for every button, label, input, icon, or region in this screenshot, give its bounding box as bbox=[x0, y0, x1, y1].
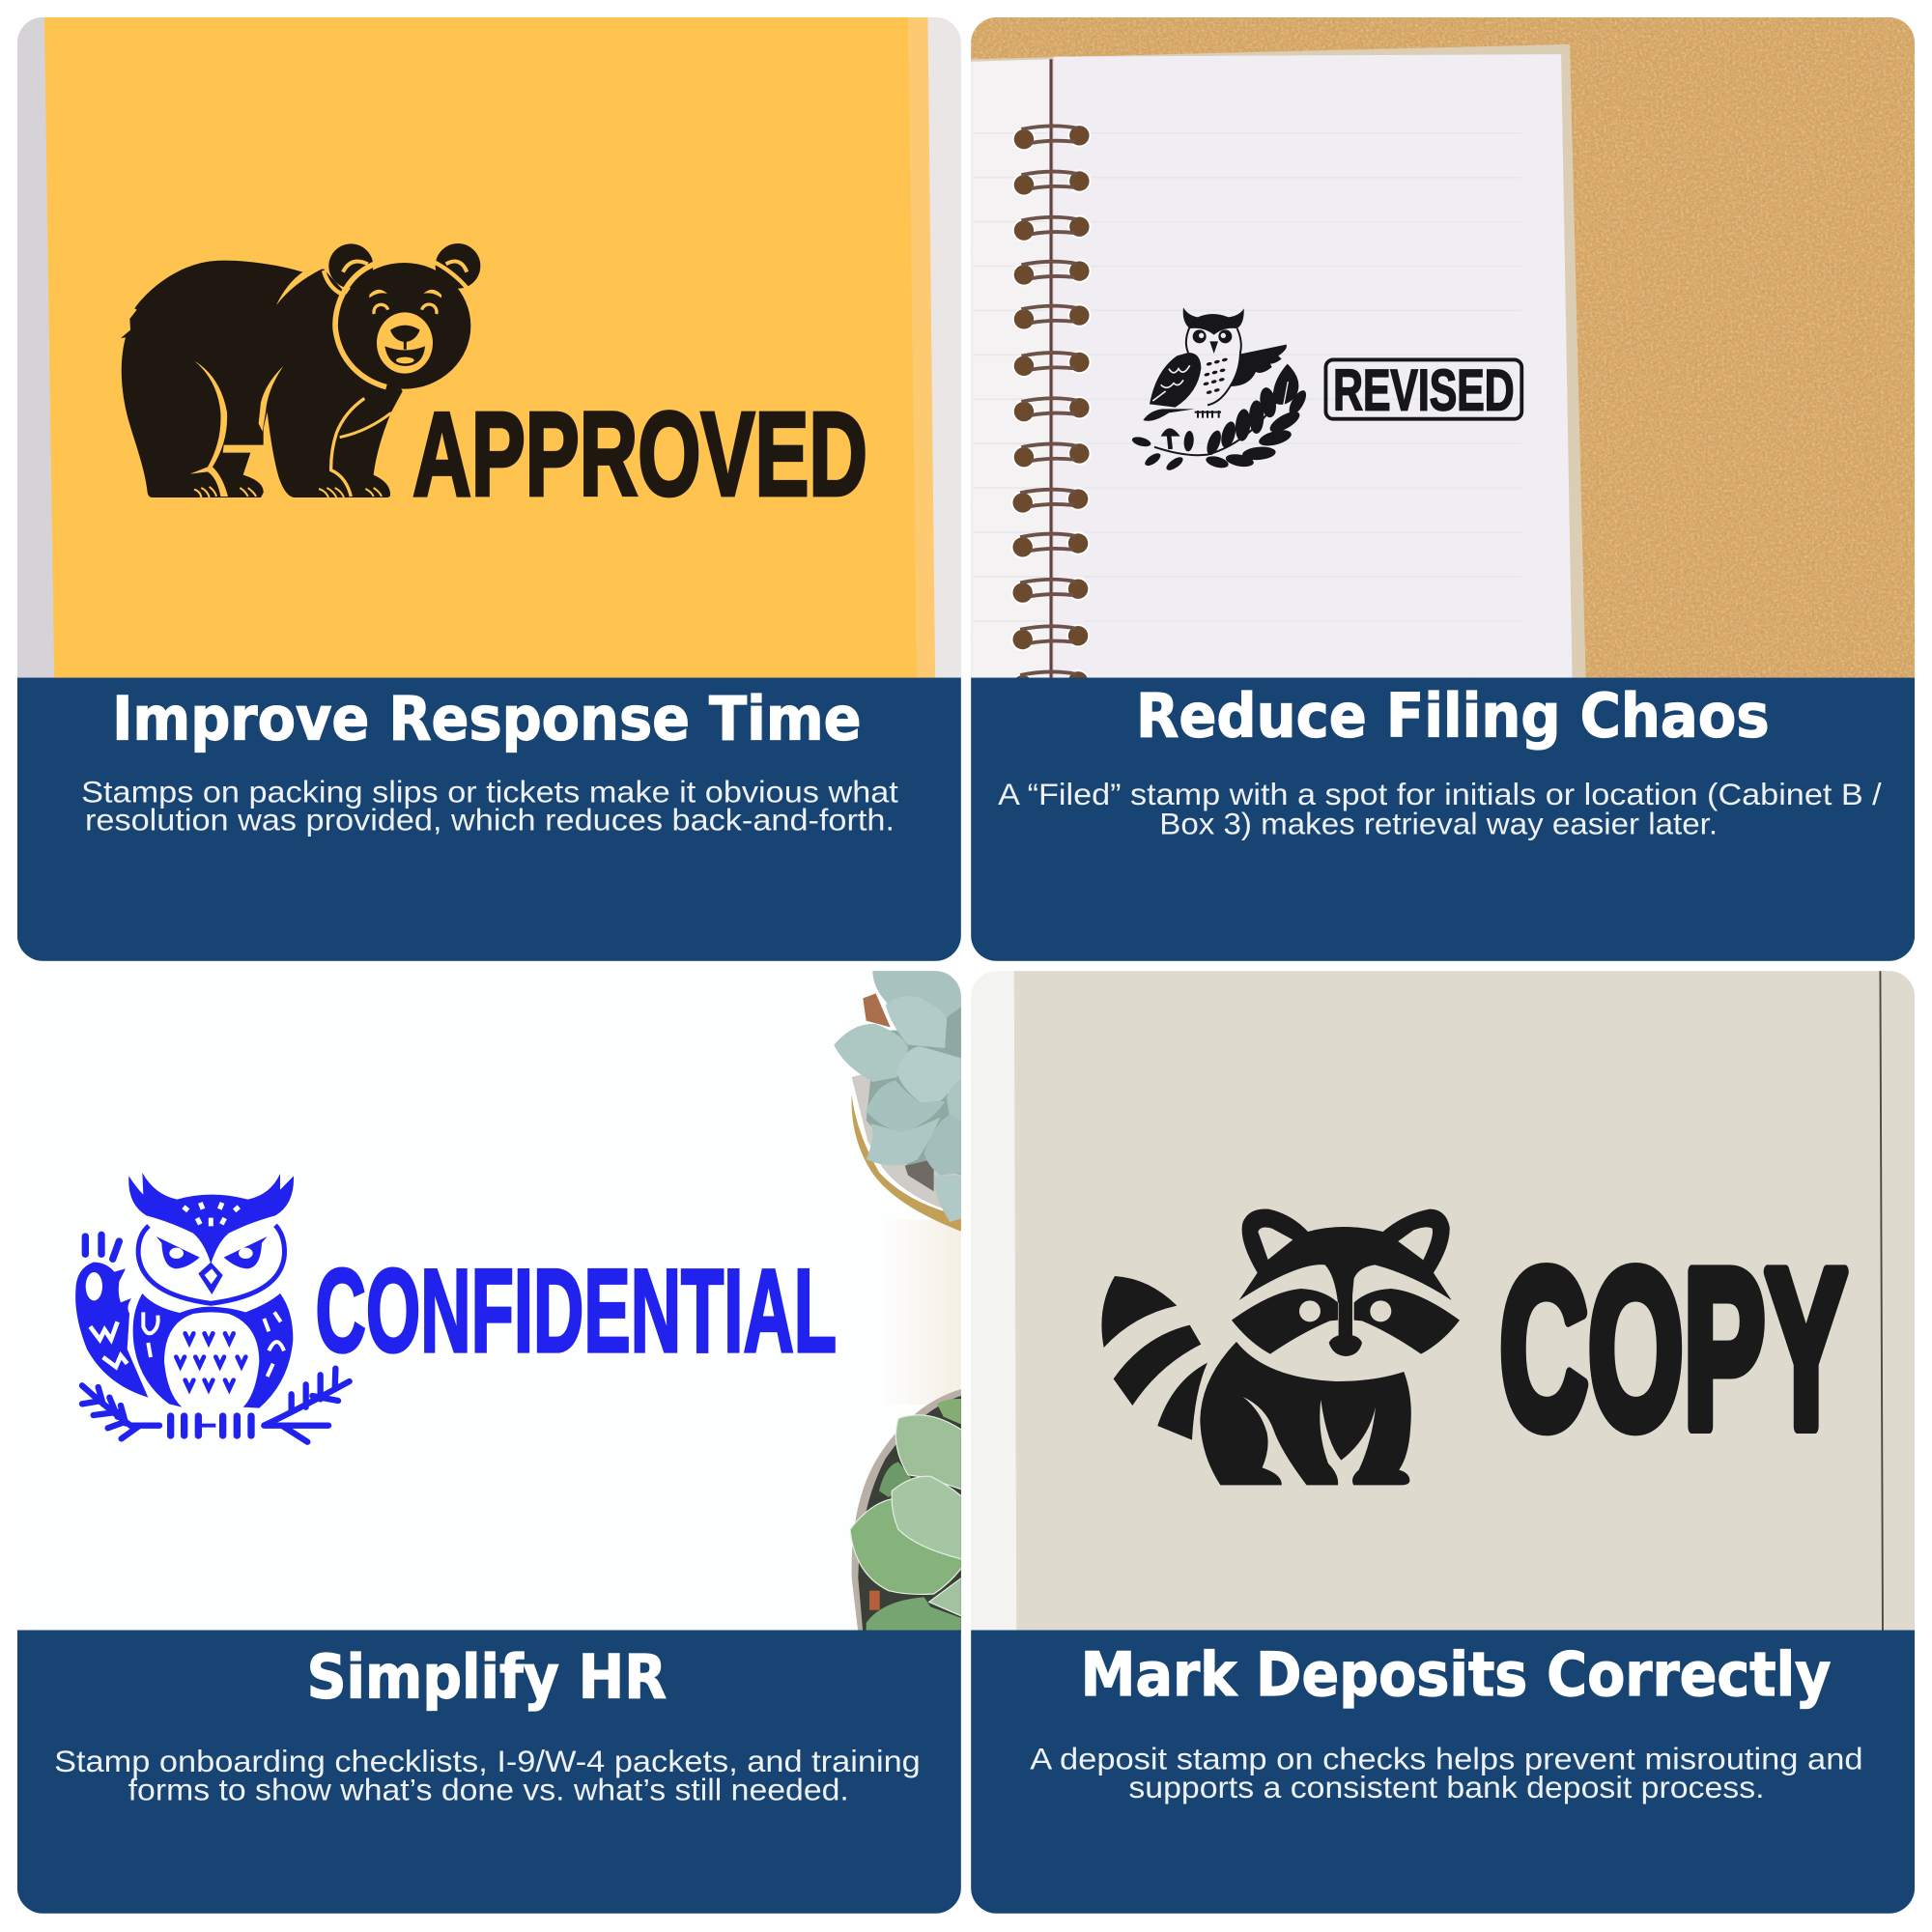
photo: white desk bbox=[17, 971, 961, 1632]
panel: reduce filing chaos bbox=[971, 17, 1915, 961]
body text: A “Filed” stamp with a spot for initials or location (Cabinet B / bbox=[998, 777, 1882, 811]
photo: yellow paper bbox=[17, 17, 961, 678]
body text: Box 3) makes retrieval way easier later. bbox=[1159, 807, 1718, 841]
stamp text: approved: APPROVED bbox=[412, 388, 867, 522]
body text bbox=[1030, 1742, 1863, 1804]
body text: supports a consistent bank deposit process. bbox=[1128, 1770, 1765, 1804]
stamp text: confidential: CONFIDENTIAL bbox=[316, 1244, 837, 1377]
notebook spiral bbox=[1011, 124, 1091, 696]
stamp: bear bbox=[121, 243, 480, 497]
photo: lower succulent bbox=[850, 1388, 966, 1633]
photo: cork board bbox=[971, 17, 1915, 678]
heading: Mark Deposits Correctly bbox=[1081, 1639, 1831, 1710]
photo: beige card bbox=[971, 971, 1915, 1632]
body text: resolution was provided, which reduces back-and-forth. bbox=[85, 803, 895, 838]
stamp: owl on branch bbox=[1131, 307, 1310, 472]
body text: forms to show what’s done vs. what’s still needed. bbox=[128, 1773, 849, 1807]
body text bbox=[998, 777, 1882, 841]
panel: improve response time bbox=[17, 17, 961, 961]
stamp: raccoon bbox=[1101, 1208, 1460, 1486]
stamp: blue owl bbox=[75, 1173, 350, 1442]
caption band bbox=[971, 678, 1915, 961]
body text bbox=[54, 1744, 921, 1807]
caption band bbox=[17, 1631, 961, 1914]
heading: Improve Response Time bbox=[112, 683, 862, 753]
heading: Reduce Filing Chaos bbox=[1136, 681, 1770, 752]
body text bbox=[83, 781, 898, 837]
body text: Stamps on packing slips or tickets make it obvious what bbox=[81, 774, 898, 809]
body text: A deposit stamp on checks helps prevent misrouting and bbox=[1030, 1742, 1863, 1776]
photo: upper succulent bbox=[834, 971, 966, 1234]
photo: notebook bbox=[971, 44, 1586, 678]
heading: Simplify HR bbox=[307, 1642, 667, 1713]
body text: Stamp onboarding checklists, I-9/W-4 packets, and training bbox=[54, 1744, 921, 1778]
caption band bbox=[17, 678, 961, 961]
panel: mark deposits correctly bbox=[971, 971, 1915, 1914]
caption band bbox=[971, 1631, 1915, 1914]
panel: simplify hr bbox=[17, 971, 966, 1914]
stamp: revised label: REVISED bbox=[1333, 358, 1515, 423]
